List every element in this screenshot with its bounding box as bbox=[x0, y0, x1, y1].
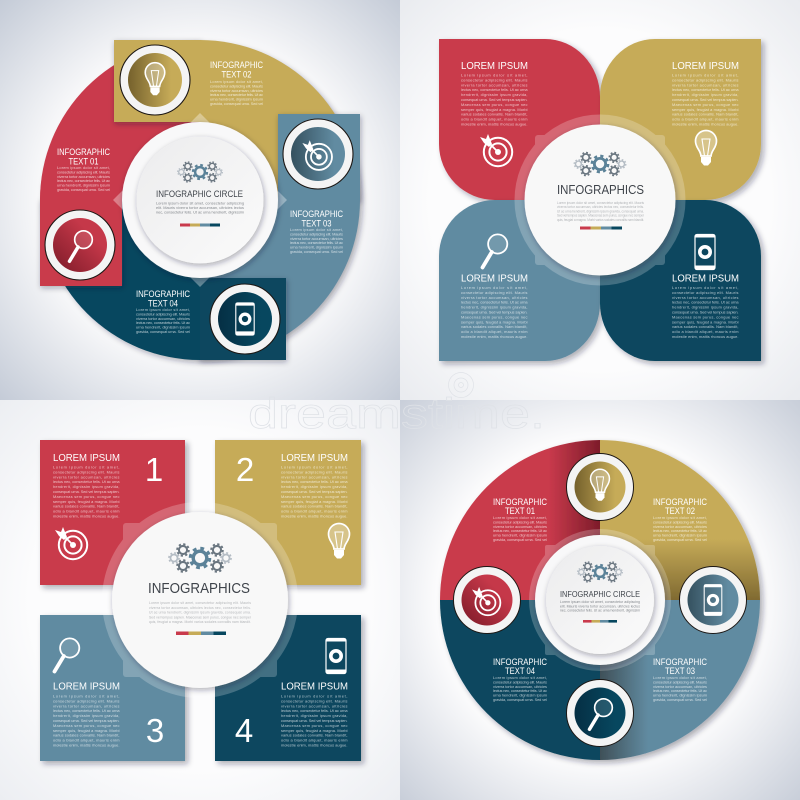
text block: gold petal: varius sodales convallis. Nam blandit, bbox=[672, 112, 738, 117]
center text bbox=[557, 201, 645, 222]
center text: Lorem ipsum dolor sit amet, consectetur adipiscing bbox=[156, 200, 244, 206]
center text bbox=[156, 200, 244, 214]
text block 03: TEXT 03 bbox=[665, 666, 695, 676]
center text: elit. Mauris viverra tortor accumsan, ultricies lectus bbox=[156, 205, 244, 210]
text block: blue petal: consectetur adipiscing elit. Mauris bbox=[461, 290, 528, 295]
text block 02: gravida, consequat urna. Sed vel bbox=[210, 101, 263, 106]
text block: navy petal: consectetur adipiscing elit. Mauris bbox=[672, 290, 739, 295]
text block: red petal: LOREM IPSUM bbox=[461, 61, 528, 72]
text block: gold square: consequat urna. Sed vel tempus sapien. bbox=[281, 489, 348, 494]
text block 01 bbox=[57, 147, 110, 192]
text block: red petal: consequat urna. Sed vel tempus sapien. bbox=[461, 97, 528, 102]
text block 03: lectus nec, consectetur felis. Ut ac bbox=[653, 688, 707, 693]
text block 04: viverra tortor accumsan, ultricies bbox=[493, 684, 547, 689]
text block 04: gravida, consequat urna. Sed vel bbox=[493, 697, 547, 702]
text block: navy petal: Maecenas sem purus, congue nec bbox=[672, 314, 739, 319]
number 3: 3 bbox=[146, 712, 164, 749]
text block: red square: Maecenas sem purus, congue nec bbox=[53, 494, 120, 499]
icon badge: phone bbox=[210, 284, 280, 354]
center text: elit. Mauris viverra tortor accumsan, ultricies lectus bbox=[560, 604, 640, 608]
text block: gold square: odio a blandit aliquet, mauris enim bbox=[281, 509, 348, 514]
circle base shadow bbox=[40, 40, 360, 360]
text block 02: urna hendrerit, dignissim ipsum bbox=[210, 97, 263, 102]
text block: navy square: hendrerit, dignissim ipsum gravida, bbox=[281, 713, 348, 718]
text block: gold petal: odio a blandit aliquet, mauris enim bbox=[672, 117, 738, 122]
text block: gold petal: Maecenas sem purus, congue nec bbox=[672, 102, 739, 107]
text block: red square: consectetur adipiscing elit. Mauris bbox=[53, 469, 120, 474]
text block 01: viverra tortor accumsan, ultricies bbox=[493, 524, 547, 529]
text block 04: TEXT 04 bbox=[148, 298, 178, 308]
gold tab bbox=[114, 40, 201, 122]
text block 03: urna hendrerit, dignissim ipsum bbox=[653, 693, 707, 698]
center text: nec, consectetur felis. Ut ac urna hendrerit, dignissim bbox=[560, 609, 640, 613]
text block 01: consectetur adipiscing elit. Mauris bbox=[57, 169, 110, 174]
text block 04: Lorem ipsum dolor sit amet, bbox=[136, 307, 190, 312]
gold quarter bbox=[200, 40, 360, 200]
text block: red square: LOREM IPSUM bbox=[53, 453, 120, 464]
text block 02: viverra tortor accumsan, ultricies bbox=[653, 524, 707, 529]
text block: navy square: consectetur adipiscing elit. Mauris bbox=[281, 698, 348, 703]
color bar bbox=[176, 632, 226, 635]
text block 02: Lorem ipsum dolor sit amet, bbox=[653, 515, 707, 520]
watermark: dreamstime. bbox=[248, 390, 545, 438]
icon: bulb bbox=[328, 524, 350, 558]
number 1: 1 bbox=[145, 451, 163, 488]
center text: quis, feugiat a magna. Morbi varius sodales convallis nam blandit. bbox=[557, 218, 644, 222]
center title: INFOGRAPHICS bbox=[557, 182, 644, 197]
text block: blue petal: hendrerit, dignissim ipsum gravida, bbox=[461, 305, 528, 310]
text block 02 bbox=[210, 60, 263, 106]
panel: numbered squares bottom left bbox=[40, 440, 361, 761]
text block: blue square: odio a blandit aliquet, mauris enim bbox=[53, 738, 120, 743]
text block 04: consectetur adipiscing elit. Mauris bbox=[493, 679, 547, 684]
text block: navy petal: consequat urna. Sed vel tempus sapien. bbox=[672, 310, 738, 314]
text block: blue square: lectus nec, consectetur felis. Ut ac urna bbox=[53, 708, 120, 713]
text block 01 bbox=[493, 497, 547, 542]
text block: gold petal: Lorem ipsum dolor sit amet, bbox=[672, 72, 738, 78]
text block: blue petal: Maecenas sem purus, congue nec bbox=[461, 314, 528, 319]
text block: red square: molestie enim, mattis rhoncus augue. bbox=[53, 514, 120, 518]
text block 01: TEXT 01 bbox=[68, 156, 98, 166]
text block: gold petal: consequat urna. Sed vel tempus sapien. bbox=[672, 97, 738, 102]
red quarter bbox=[40, 40, 200, 200]
text block 01: consectetur adipiscing elit. Mauris bbox=[493, 519, 547, 524]
text block: blue petal: consequat urna. Sed vel tempus sapien. bbox=[461, 310, 528, 314]
gears icon bbox=[178, 162, 222, 182]
text block: navy petal bbox=[672, 274, 739, 339]
text block: red petal: Maecenas sem purus, congue nec bbox=[461, 102, 528, 107]
text block 02: INFOGRAPHIC bbox=[653, 497, 707, 507]
icon: magnifier bbox=[54, 638, 79, 672]
center text: viverra tortor accumsan, ultricies lectus nec, consectetur felis. bbox=[149, 606, 251, 610]
icon badge: target bbox=[283, 119, 353, 189]
text block: navy petal: varius sodales convallis. Nam blandit, bbox=[672, 324, 738, 329]
text block: blue petal: odio a blandit aliquet, mauris enim bbox=[461, 329, 528, 334]
text block: red square: consequat urna. Sed vel tempus sapien. bbox=[53, 489, 120, 494]
navy petal bbox=[600, 200, 761, 361]
translucent ring bbox=[529, 529, 671, 671]
text block: navy square: LOREM IPSUM bbox=[281, 682, 348, 692]
text block: blue square: hendrerit, dignissim ipsum gravida, bbox=[53, 713, 120, 718]
text block 01: gravida, consequat urna. Sed vel bbox=[493, 537, 547, 542]
center text: nec, consectetur felis. Ut ac urna hendrerit, dignissim bbox=[156, 209, 244, 214]
text block: red square: Lorem ipsum dolor sit amet, bbox=[53, 464, 120, 470]
text block: gold petal: semper quis, feugiat a magna. Morbi bbox=[672, 107, 739, 112]
text block 01: lectus nec, consectetur felis. Ut ac bbox=[57, 178, 110, 183]
text block 04: viverra tortor accumsan, ultricies bbox=[136, 316, 190, 321]
gears icon bbox=[574, 152, 626, 176]
red tab bbox=[40, 199, 122, 286]
text block 01: Lorem ipsum dolor sit amet, bbox=[57, 165, 110, 170]
text block: red petal: molestie enim, mattis rhoncus augue. bbox=[461, 122, 528, 126]
icon: magnifier bbox=[482, 234, 507, 268]
text block: navy petal: molestie enim, mattis rhoncus augue. bbox=[672, 334, 738, 339]
text block: blue square: molestie enim, mattis rhoncus augue. bbox=[53, 742, 120, 748]
center text: Sed vel tempus sapien. Maecenas sem purus, congue nec semper bbox=[557, 214, 645, 218]
center disk bbox=[112, 512, 288, 688]
text block 02: viverra tortor accumsan, ultricies bbox=[210, 88, 263, 93]
translucent ring bbox=[102, 502, 298, 698]
text block 04 bbox=[136, 289, 190, 334]
center text: Ut ac urna hendrerit, dignissim ipsum gravida, consequat urna. bbox=[557, 209, 644, 213]
icon: phone bbox=[326, 638, 346, 674]
text block 03: gravida, consequat urna. Sed vel bbox=[653, 697, 707, 702]
red seam cover bbox=[40, 180, 140, 200]
center text: Ut ac urna hendrerit, dignissim ipsum gravida, consequat urna. bbox=[149, 611, 251, 615]
text block 03: Lorem ipsum dolor sit amet, bbox=[653, 675, 707, 680]
icon badge: phone bbox=[680, 566, 746, 634]
text block: red petal: semper quis, feugiat a magna. Morbi bbox=[461, 107, 528, 112]
text block 02: gravida, consequat urna. Sed vel bbox=[653, 537, 707, 542]
text block: blue square: LOREM IPSUM bbox=[53, 682, 120, 692]
text block: red petal: lectus nec, consectetur felis. Ut ac urna bbox=[461, 87, 528, 92]
text block: red petal: consectetur adipiscing elit. Mauris bbox=[461, 77, 528, 82]
text block: gold square: LOREM IPSUM bbox=[281, 453, 348, 464]
text block: gold petal: lectus nec, consectetur felis. Ut ac urna bbox=[672, 87, 739, 92]
text block: red petal: varius sodales convallis. Nam blandit, bbox=[461, 112, 528, 117]
text block 02: lectus nec, consectetur felis. Ut ac bbox=[653, 528, 707, 533]
text block 02: TEXT 02 bbox=[665, 506, 695, 516]
center ring bbox=[535, 535, 665, 665]
text block: gold square: viverra tortor accumsan, ultricies bbox=[281, 474, 348, 479]
text block: blue petal bbox=[461, 274, 528, 339]
text block: gold square: lectus nec, consectetur felis. Ut ac urna bbox=[281, 479, 348, 484]
text block 02: INFOGRAPHIC bbox=[210, 60, 263, 70]
center text: quis, feugiat a magna. Morbi varius sodales convallis nam blandit. bbox=[149, 620, 251, 624]
text block 04: TEXT 04 bbox=[505, 666, 535, 676]
text block: blue petal: viverra tortor accumsan, ultricies bbox=[461, 295, 528, 300]
center text bbox=[560, 600, 640, 613]
text block: gold square: Lorem ipsum dolor sit amet, bbox=[281, 464, 348, 470]
color bar bbox=[583, 620, 617, 623]
text block: blue petal: molestie enim, mattis rhoncus augue. bbox=[461, 334, 528, 339]
center title: INFOGRAPHIC CIRCLE bbox=[156, 189, 243, 199]
center text: Sed vel tempus sapien. Maecenas sem purus, congue nec semper bbox=[149, 615, 252, 619]
text block: blue petal: Lorem ipsum dolor sit amet, bbox=[461, 285, 528, 290]
blue square bbox=[40, 615, 185, 761]
icon badge: target bbox=[454, 566, 520, 634]
text block: red petal: odio a blandit aliquet, mauris enim bbox=[461, 117, 528, 122]
text block: gold petal bbox=[672, 61, 739, 126]
text block: navy square bbox=[281, 682, 348, 748]
icon: bulb bbox=[696, 130, 716, 166]
text block: gold square: Maecenas sem purus, congue nec bbox=[281, 494, 348, 499]
center disk bbox=[136, 136, 264, 264]
text block 04: INFOGRAPHIC bbox=[493, 657, 547, 667]
text block: red square: semper quis, feugiat a magna. Morbi bbox=[53, 499, 120, 504]
text block 02: lectus nec, consectetur felis. Ut ac bbox=[210, 92, 263, 97]
watermark bbox=[248, 372, 545, 438]
text block: gold petal: viverra tortor accumsan, ultricies bbox=[672, 82, 739, 87]
text block: navy square: odio a blandit aliquet, mauris enim bbox=[281, 738, 348, 743]
text block: blue petal: LOREM IPSUM bbox=[461, 274, 528, 284]
gold square bbox=[215, 440, 361, 585]
text block: blue square: viverra tortor accumsan, ultricies bbox=[53, 703, 120, 708]
text block 02: TEXT 02 bbox=[222, 70, 252, 80]
navy tab bbox=[199, 278, 286, 360]
text block 02: urna hendrerit, dignissim ipsum bbox=[653, 533, 707, 538]
panel: pinwheel circle top left bbox=[40, 40, 360, 360]
text block 01: Lorem ipsum dolor sit amet, bbox=[493, 515, 547, 520]
gears icon bbox=[169, 544, 231, 572]
text block: gold square: consectetur adipiscing elit. Mauris bbox=[281, 469, 348, 474]
text block 03: INFOGRAPHIC bbox=[653, 657, 707, 667]
text block 02: consectetur adipiscing elit. Mauris bbox=[210, 83, 263, 88]
text block: navy square: Lorem ipsum dolor sit amet, bbox=[281, 694, 348, 698]
text block: navy petal: hendrerit, dignissim ipsum gravida, bbox=[672, 305, 738, 310]
text block 04: gravida, consequat urna. Sed vel bbox=[136, 329, 190, 334]
text block 03: TEXT 03 bbox=[302, 218, 332, 228]
text block: red square bbox=[53, 453, 120, 518]
icon badge: magnifier bbox=[45, 210, 115, 280]
text block 04: consectetur adipiscing elit. Mauris bbox=[136, 311, 190, 316]
icon: target bbox=[480, 134, 512, 166]
icon: phone bbox=[695, 234, 715, 270]
text block: navy petal: odio a blandit aliquet, mauris enim bbox=[672, 329, 738, 334]
text block: navy square: semper quis, feugiat a magna. Morbi bbox=[281, 728, 348, 733]
center text: Lorem ipsum dolor sit amet, consectetur adipiscing elit. Mauris bbox=[149, 601, 251, 605]
icon badge: bulb bbox=[566, 454, 634, 520]
text block: gold petal: hendrerit, dignissim ipsum gravida, bbox=[672, 92, 738, 97]
text block 03: Lorem ipsum dolor sit amet, bbox=[290, 227, 343, 232]
text block: gold petal: consectetur adipiscing elit. Mauris bbox=[672, 77, 739, 82]
text block 03: lectus nec, consectetur felis. Ut ac bbox=[290, 240, 343, 245]
icon badge: bulb bbox=[120, 45, 190, 115]
text block: navy petal: semper quis, feugiat a magna. Morbi bbox=[672, 319, 739, 324]
text block 04: urna hendrerit, dignissim ipsum bbox=[493, 693, 547, 698]
text block: blue square: consequat urna. Sed vel tempus sapien. bbox=[53, 718, 120, 723]
text block: red petal: hendrerit, dignissim ipsum gravida, bbox=[461, 92, 528, 97]
text block 04: lectus nec, consectetur felis. Ut ac bbox=[136, 320, 190, 325]
text block: red square: varius sodales convallis. Nam blandit, bbox=[53, 504, 120, 509]
text block 01: urna hendrerit, dignissim ipsum bbox=[57, 183, 110, 188]
text block: blue petal: varius sodales convallis. Nam blandit, bbox=[461, 324, 528, 329]
text block 01: urna hendrerit, dignissim ipsum bbox=[493, 533, 547, 538]
color bar bbox=[180, 224, 220, 226]
blue tab bbox=[278, 114, 360, 201]
center text: Lorem ipsum dolor sit amet, consectetur adipiscing elit. Mauris bbox=[557, 201, 644, 205]
text block 04: lectus nec, consectetur felis. Ut ac bbox=[493, 688, 547, 693]
text block 03: urna hendrerit, dignissim ipsum bbox=[290, 245, 343, 250]
text block: navy square: lectus nec, consectetur felis. Ut ac urna bbox=[281, 708, 348, 713]
text block: gold square: varius sodales convallis. Nam blandit, bbox=[281, 504, 348, 509]
text block: navy square: viverra tortor accumsan, ultricies bbox=[281, 703, 348, 708]
text block: navy square: molestie enim, mattis rhoncus augue. bbox=[281, 742, 348, 748]
ring quarters bbox=[440, 440, 760, 760]
navy square bbox=[215, 615, 361, 761]
text block: blue square: varius sodales convallis. Nam blandit, bbox=[53, 733, 120, 738]
text block: red square: odio a blandit aliquet, mauris enim bbox=[53, 509, 120, 514]
blue quarter bbox=[200, 200, 360, 360]
gold petal bbox=[600, 39, 761, 200]
text block: red petal: viverra tortor accumsan, ultricies bbox=[461, 82, 528, 87]
text block 03: viverra tortor accumsan, ultricies bbox=[653, 684, 707, 689]
text block: navy square: consequat urna. Sed vel tempus sapien. bbox=[281, 718, 348, 723]
text block: red square: viverra tortor accumsan, ultricies bbox=[53, 474, 120, 479]
text block 02 bbox=[653, 497, 707, 542]
icon badge: magnifier bbox=[566, 680, 634, 746]
center disk bbox=[524, 124, 676, 276]
text block: gold square: semper quis, feugiat a magna. Morbi bbox=[281, 499, 348, 504]
text block: red petal: Lorem ipsum dolor sit amet, bbox=[461, 72, 528, 78]
text block: navy petal: viverra tortor accumsan, ultricies bbox=[672, 295, 739, 300]
text block 01: gravida, consequat urna. Sed vel bbox=[57, 187, 110, 192]
center title: INFOGRAPHICS bbox=[148, 580, 250, 597]
text block: gold petal: molestie enim, mattis rhoncus augue. bbox=[672, 122, 738, 126]
text block 02: Lorem ipsum dolor sit amet, bbox=[210, 79, 263, 84]
text block 03: consectetur adipiscing elit. Mauris bbox=[653, 679, 707, 684]
center text: Lorem ipsum dolor sit amet, consectetur adipiscing bbox=[560, 600, 640, 604]
text block: blue square: Lorem ipsum dolor sit amet, bbox=[53, 694, 120, 698]
panel: segmented circle bottom right bbox=[440, 440, 760, 760]
text block: navy square: Maecenas sem purus, congue nec bbox=[281, 723, 348, 728]
number 4: 4 bbox=[235, 712, 253, 749]
text block 03: viverra tortor accumsan, ultricies bbox=[290, 236, 343, 241]
text block 03 bbox=[290, 209, 343, 254]
center title: INFOGRAPHIC CIRCLE bbox=[560, 590, 640, 599]
text block: blue square: consectetur adipiscing elit. Mauris bbox=[53, 698, 120, 703]
text block 04: Lorem ipsum dolor sit amet, bbox=[493, 675, 547, 680]
text block: gold square: molestie enim, mattis rhoncus augue. bbox=[281, 514, 348, 518]
text block 04 bbox=[493, 657, 547, 702]
text block 01: INFOGRAPHIC bbox=[57, 147, 110, 157]
text block: blue petal: lectus nec, consectetur felis. Ut ac urna bbox=[461, 300, 528, 305]
text block 04: urna hendrerit, dignissim ipsum bbox=[136, 325, 190, 330]
text block 03: INFOGRAPHIC bbox=[290, 209, 343, 219]
text block: navy petal: LOREM IPSUM bbox=[672, 274, 739, 284]
text block: gold square: hendrerit, dignissim ipsum gravida, bbox=[281, 484, 348, 489]
color bar bbox=[580, 226, 622, 230]
text block 04: INFOGRAPHIC bbox=[136, 289, 190, 299]
translucent ring bbox=[514, 114, 686, 286]
text block 03: gravida, consequat urna. Sed vel bbox=[290, 249, 343, 254]
text block 01: lectus nec, consectetur felis. Ut ac bbox=[493, 528, 547, 533]
number 2: 2 bbox=[236, 451, 254, 488]
navy quarter bbox=[40, 200, 200, 360]
red square bbox=[40, 440, 185, 585]
text block 03 bbox=[653, 657, 707, 702]
center text bbox=[149, 601, 252, 624]
center ring bbox=[113, 113, 287, 287]
text block 01: TEXT 01 bbox=[505, 506, 535, 516]
center disk bbox=[546, 546, 654, 654]
text block: blue square bbox=[53, 682, 120, 748]
icon: target bbox=[55, 527, 87, 559]
panel: petals top right bbox=[439, 39, 761, 361]
text block: navy petal: Lorem ipsum dolor sit amet, bbox=[672, 285, 738, 290]
text block 01: INFOGRAPHIC bbox=[493, 497, 547, 507]
text block: navy square: varius sodales convallis. Nam blandit, bbox=[281, 733, 348, 738]
text block: gold square bbox=[281, 453, 348, 518]
text block: red petal bbox=[461, 61, 528, 126]
text block: blue petal: semper quis, feugiat a magna. Morbi bbox=[461, 319, 528, 324]
text block 03: consectetur adipiscing elit. Mauris bbox=[290, 231, 343, 236]
text block: navy petal: lectus nec, consectetur felis. Ut ac urna bbox=[672, 300, 739, 305]
text block: gold petal: LOREM IPSUM bbox=[672, 61, 739, 72]
blue petal bbox=[439, 200, 600, 361]
red petal bbox=[439, 39, 600, 200]
text block: blue square: Maecenas sem purus, congue nec bbox=[53, 723, 120, 728]
text block 02: consectetur adipiscing elit. Mauris bbox=[653, 519, 707, 524]
text block: red square: lectus nec, consectetur felis. Ut ac urna bbox=[53, 479, 120, 484]
text block 01: viverra tortor accumsan, ultricies bbox=[57, 174, 110, 179]
center text: viverra tortor accumsan, ultricies lectus nec, consectetur felis. bbox=[557, 205, 644, 209]
gears icon bbox=[578, 562, 622, 582]
text block: red square: hendrerit, dignissim ipsum gravida, bbox=[53, 484, 120, 489]
text block: blue square: semper quis, feugiat a magna. Morbi bbox=[53, 728, 120, 733]
